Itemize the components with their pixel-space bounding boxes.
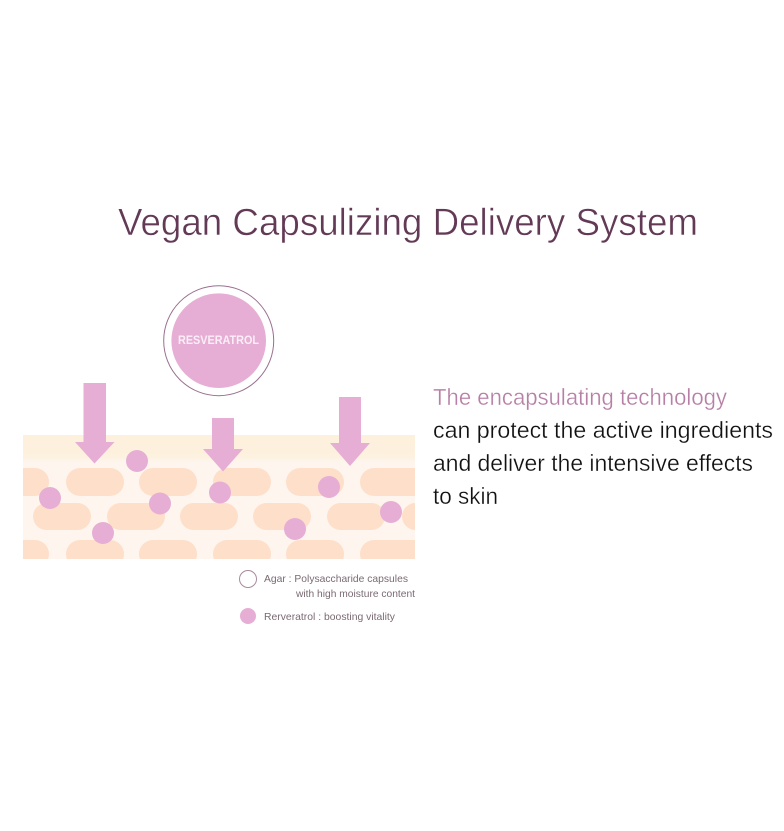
legend: agar: with high moisture content [295,588,415,600]
diagram: resveratrol particles [39,450,402,544]
body text: can protect the active ingredients [433,417,773,443]
legend: agar [240,570,415,600]
resveratrol capsule [164,286,274,396]
diagram: skin layer [23,435,415,559]
body text: to skin [433,483,498,509]
body text [433,384,773,509]
legend: resveratrol: Rerveratrol : boosting vitality [264,611,396,623]
arrow: centre [203,418,243,472]
resveratrol capsule: RESVERATROL [178,333,259,347]
arrow: left [75,383,114,464]
legend: resveratrol [240,608,396,624]
body text: and deliver the intensive effects [433,450,753,476]
title: Vegan Capsulizing Delivery System [118,202,698,244]
infographic canvas [23,208,772,624]
body text: The encapsulating technology [433,384,727,410]
arrow: right [330,397,370,466]
legend: agar: Agar : Polysaccharide capsules [264,573,408,585]
